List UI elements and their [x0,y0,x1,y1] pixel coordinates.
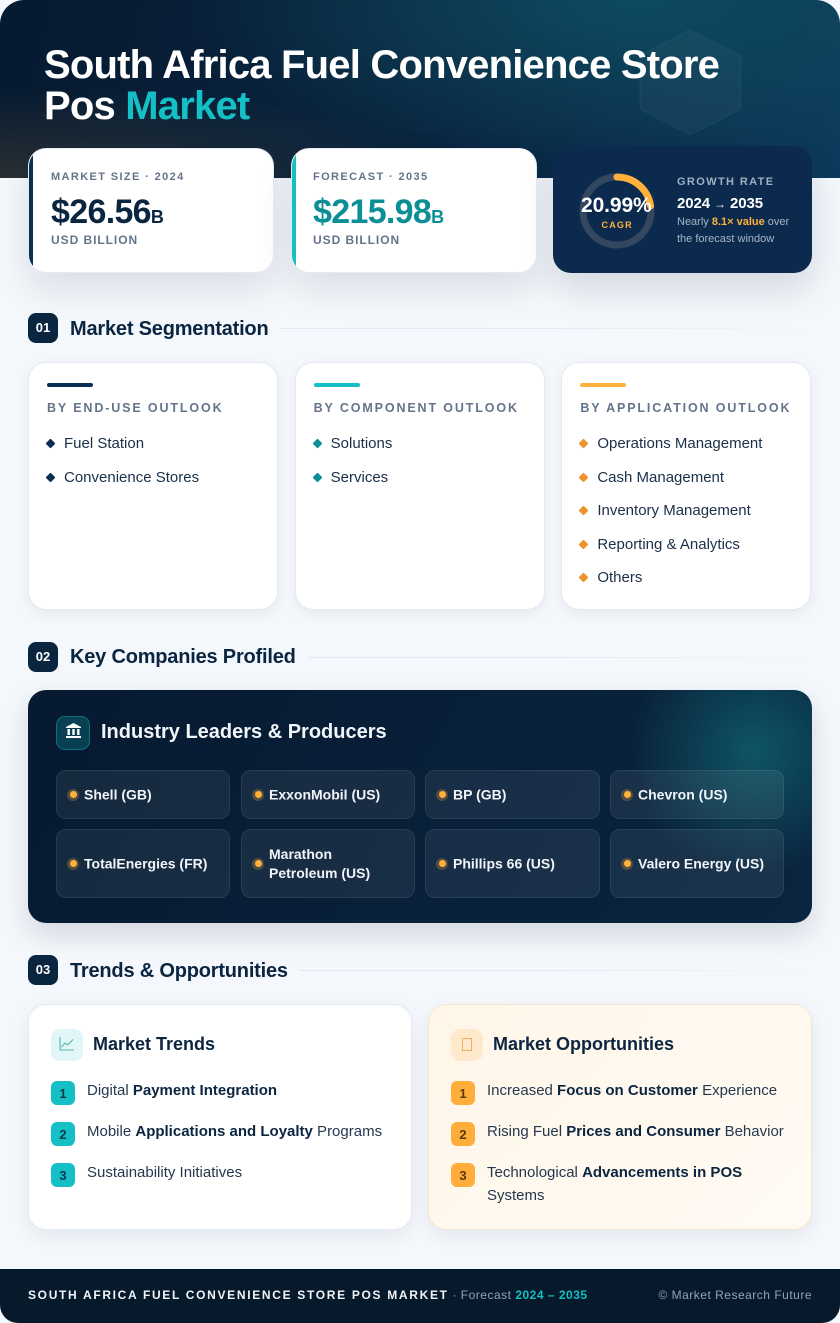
panel: end-use: Fuel Station [64,435,144,452]
stat card: forecast: $215.98B [313,193,444,231]
panel: companies: Petroleum (US) [269,864,370,880]
panel: companies [28,690,812,923]
trend 3: 3 [59,1168,67,1183]
stat card: market size: MARKET SIZE · 2024 [51,171,185,183]
panel: market trends: Digital Payment Integration [87,1082,277,1099]
stat card: market size [28,148,274,273]
panel: market trends: Sustainability Initiatives [87,1164,242,1181]
growth range: 2024 → 2035 [677,195,763,212]
panel: end-use [28,362,278,610]
growth note: Nearly 8.1× value over [677,216,789,228]
title [44,43,719,128]
panel: end-use: Convenience Stores [64,469,199,486]
stat card: forecast: FORECAST · 2035 [313,171,428,183]
panel: application [561,362,811,610]
footer title: SOUTH AFRICA FUEL CONVENIENCE STORE POS MARKET · Forecast 2024 – 2035 [28,1288,588,1302]
panel title: Industry Leaders & Producers [101,721,387,743]
panel: component: Solutions [331,435,392,452]
panel: application: Cash Management [597,469,724,486]
section 01 heading: 01 [36,320,50,335]
icon: bank [56,716,90,750]
section 02 heading: 02 [36,649,50,664]
panel: end-use: BY END-USE OUTLOOK [47,401,224,415]
panel: application: Operations Management [597,435,762,452]
panel: market trends [28,1004,412,1230]
company chips [56,770,230,819]
CAGR value: 20.99% [581,194,652,217]
stat card: growth rate [553,146,812,273]
section 03 heading [28,955,696,985]
header band [0,0,840,178]
panel: component: Services [331,469,388,486]
panel: companies: Valero Energy (US) [638,855,764,871]
panel: companies: Marathon [269,846,332,862]
stat card: market size: USD BILLION [51,233,138,247]
opportunity 3 [451,1163,475,1187]
panel: market opportunities: Rising Fuel Prices and Consumer Behavior [487,1123,784,1140]
CAGR ring [580,174,654,248]
panel: market opportunities: Systems [487,1186,545,1204]
growth label: GROWTH RATE [677,176,774,188]
panel: component: BY COMPONENT OUTLOOK [314,401,519,415]
panel: application: BY APPLICATION OUTLOOK [580,401,791,415]
trend 2 [51,1122,75,1146]
opportunity 1 [451,1081,475,1105]
panel: companies: Phillips 66 (US) [453,855,555,871]
panel: application: Others [597,569,642,586]
opportunity 1: 1 [459,1086,467,1101]
panel: application: Inventory Management [597,502,751,519]
section 01 heading: Market Segmentation [70,318,268,340]
icon: chart [51,1029,83,1061]
opportunity 3: 3 [459,1168,467,1183]
panel: companies: TotalEnergies (FR) [84,855,207,871]
section 03 heading: Trends & Opportunities [70,960,288,982]
footer [0,1269,840,1323]
icon: missing glyph box [451,1029,483,1061]
stat card: market size: $26.56B [51,193,164,231]
opportunity 2 [451,1122,475,1146]
trend 2: 2 [59,1127,67,1142]
title: South Africa Fuel Convenience Store [44,43,719,87]
title: Pos Market [44,84,249,128]
panel: application: Reporting & Analytics [597,536,740,553]
decorative hexagon [640,30,742,136]
panel: companies: ExxonMobil (US) [269,786,380,802]
panel: companies: BP (GB) [453,786,506,802]
panel: market opportunities [428,1004,812,1230]
card title: Market Opportunities [493,1034,674,1054]
section 01 heading [28,313,694,343]
card title: Market Trends [93,1034,215,1054]
panel: market opportunities: Technological Advancements in POS [487,1164,742,1181]
panel: market opportunities: Increased Focus on Customer Experience [487,1082,777,1099]
panel: market trends: Mobile Applications and Loyalty Programs [87,1123,382,1140]
footer credit: © Market Research Future [658,1288,812,1302]
growth note [677,216,789,245]
trend 1 [51,1081,75,1105]
section 02 heading: Key Companies Profiled [70,646,296,668]
stat card: forecast: USD BILLION [313,233,400,247]
growth note: the forecast window [677,233,774,245]
panel: component [295,362,545,610]
trend 3 [51,1163,75,1187]
panel: companies: Chevron (US) [638,786,727,802]
section 03 heading: 03 [36,962,50,977]
CAGR label: CAGR [602,220,633,230]
section 02 heading [28,642,700,672]
opportunity 2: 2 [459,1127,467,1142]
stat card: forecast [291,148,537,273]
company chips: Shell (GB) [84,786,152,802]
trend 1: 1 [59,1086,67,1101]
